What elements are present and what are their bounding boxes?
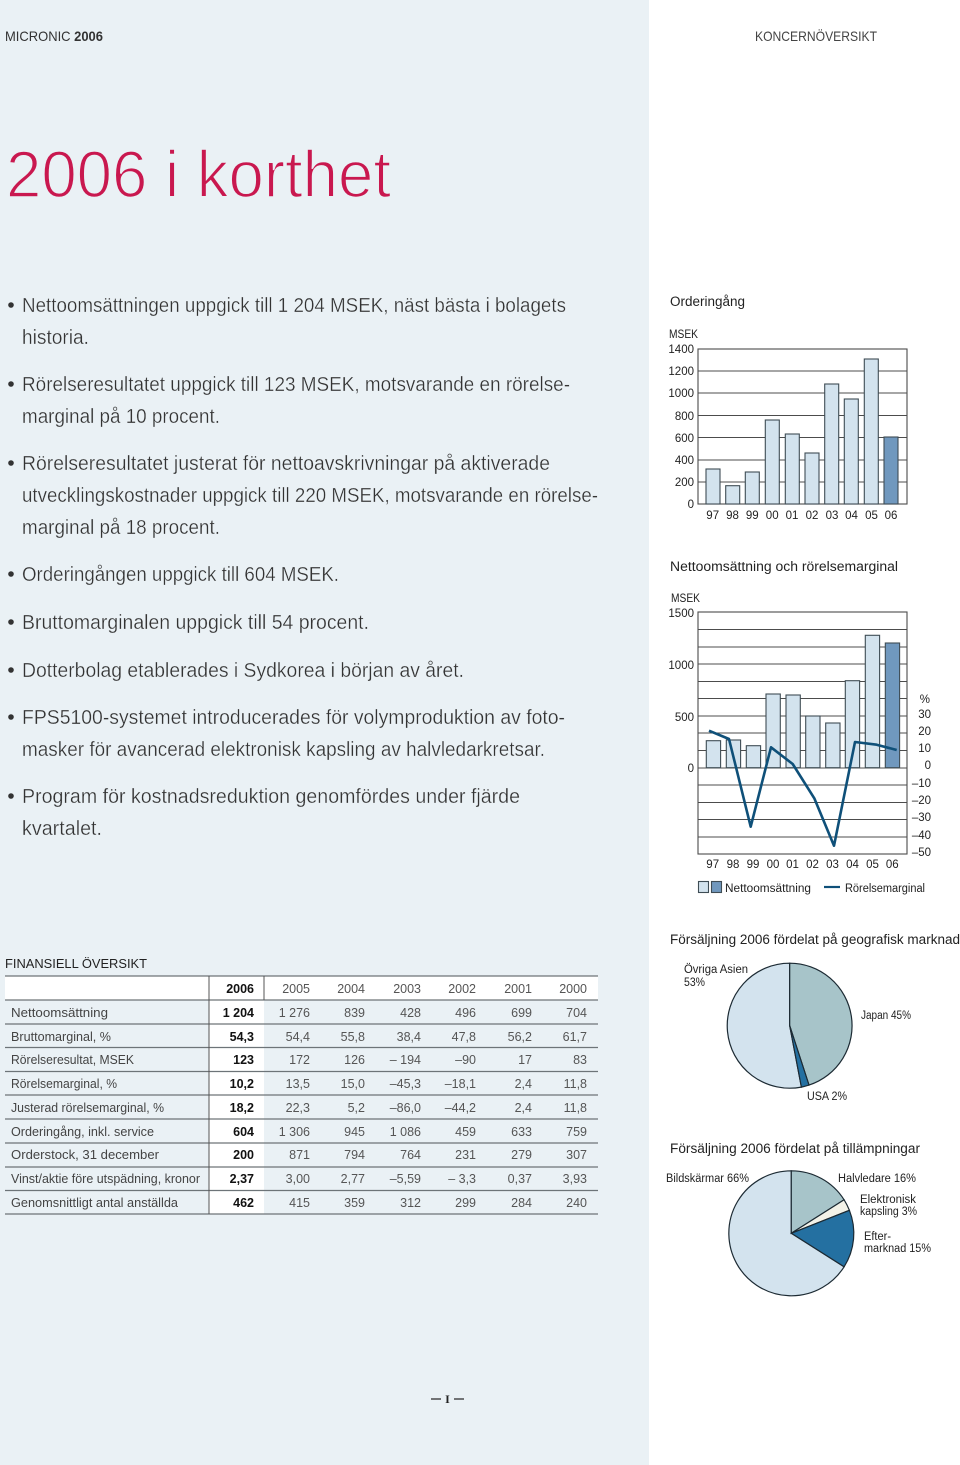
x axis labels: 97 [706, 859, 719, 871]
right axis labels: –10 [912, 778, 931, 790]
row: Nettoomsättning [11, 1006, 587, 1020]
bullet: rörelseresultat [8, 373, 570, 428]
x axis labels: 04 [845, 510, 858, 522]
row: Orderstock: 871 [289, 1148, 310, 1162]
bullet: justerat rörelseresultat [8, 452, 598, 539]
row: Rörelsemarginal: Rörelsemarginal, % [11, 1077, 117, 1091]
right axis labels: –20 [912, 795, 931, 807]
bullet: bruttomarginal: Bruttomarginalen uppgick till 54 procent. [22, 611, 369, 634]
bullet: rörelseresultat: Rörelseresultatet uppgick till 123 MSEK, motsvarande en rörelse- [22, 373, 570, 396]
chart heading: Försäljning 2006 fördelat på tillämpningar [670, 1141, 920, 1156]
chart heading: Nettoomsättning och rörelsemarginal [670, 559, 898, 574]
right axis labels: 20 [918, 726, 931, 738]
row: Orderingång: Orderingång, inkl. service [11, 1125, 154, 1139]
y axis labels: 0 [688, 499, 694, 511]
row: Vinst/aktie: – 3,3 [448, 1172, 476, 1186]
row: Rörelseresultat: Rörelseresultat, MSEK [11, 1053, 135, 1067]
row: Genomsnittligt antal anställda: 359 [344, 1196, 365, 1210]
chart: Nettoomsättning och rörelsemarginal [668, 559, 931, 895]
bullet: justerat rörelseresultat: Rörelseresultatet justerat för nettoavskrivningar på aktiverade [22, 452, 550, 475]
bullet: dotterbolag: Dotterbolag etablerades i Sydkorea i början av året. [22, 659, 464, 682]
row: Nettoomsättning: 1 204 [223, 1006, 254, 1020]
y axis labels: 1200 [668, 366, 694, 378]
row: Genomsnittligt antal anställda: Genomsnittligt antal anställda [11, 1196, 178, 1210]
row: Orderingång: 1 306 [279, 1125, 310, 1139]
x axis labels: 04 [846, 859, 859, 871]
row: Vinst/aktie: Vinst/aktie före utspädning, kronor [11, 1172, 200, 1186]
row: Bruttomarginal: 54,4 [286, 1030, 310, 1044]
row: Vinst/aktie: 0,37 [508, 1172, 532, 1186]
row: Justerad rörelsemarginal: 22,3 [286, 1101, 310, 1115]
row: Rörelseresultat: 17 [518, 1053, 532, 1067]
row: Orderstock: Orderstock, 31 december [11, 1148, 159, 1162]
row: Genomsnittligt antal anställda [11, 1196, 587, 1210]
pie labels: Elektronisk [860, 1194, 916, 1206]
left axis labels: 0 [688, 763, 694, 775]
row: Nettoomsättning: 1 276 [279, 1006, 310, 1020]
row: Vinst/aktie: –5,59 [390, 1172, 421, 1186]
x axis labels: 01 [786, 510, 798, 522]
y axis labels: 400 [675, 455, 694, 467]
x axis labels: 05 [865, 510, 878, 522]
left axis labels: 500 [675, 712, 694, 724]
x axis labels: 03 [826, 859, 839, 871]
row: Nettoomsättning: 699 [511, 1006, 532, 1020]
y axis labels: 200 [675, 477, 694, 489]
row: Orderstock: 200 [233, 1148, 254, 1162]
x axis labels [706, 859, 899, 871]
bullet: justerat rörelseresultat: marginal på 18 procent. [22, 516, 220, 539]
y axis labels: 600 [675, 433, 694, 445]
pie chart: tillämpningar [666, 1141, 931, 1296]
x axis labels: 99 [747, 859, 759, 871]
row: Rörelsemarginal: –18,1 [445, 1077, 476, 1091]
table: finansiell översikt [5, 956, 598, 1214]
pie labels: USA 2% [807, 1091, 847, 1103]
left axis labels: MSEK [671, 593, 700, 605]
x axis labels: 01 [786, 859, 799, 871]
x axis labels: 03 [826, 510, 838, 522]
right axis labels: –50 [912, 847, 931, 859]
row: Vinst/aktie: 2,37 [230, 1172, 254, 1186]
pie labels: Halvledare 16% [838, 1173, 916, 1185]
bullet: FPS5100: masker för avancerad elektronisk kapsling av halvledarkretsar. [22, 738, 545, 761]
page number: I [445, 1392, 450, 1406]
row: Orderstock: 307 [566, 1148, 587, 1162]
row: Rörelseresultat: 172 [289, 1053, 310, 1067]
x axis labels: 98 [727, 859, 739, 871]
row: Nettoomsättning: Nettoomsättning [11, 1006, 108, 1020]
row: Rörelseresultat: 126 [344, 1053, 365, 1067]
legend: Rörelsemarginal [845, 883, 925, 895]
header row: 2006 [226, 982, 254, 996]
x axis labels: 02 [806, 510, 818, 522]
row: Bruttomarginal: 47,8 [452, 1030, 476, 1044]
bullet: justerat rörelseresultat: utvecklingskostnader uppgick till 220 MSEK, motsvarande en rörelse- [22, 484, 598, 507]
right axis labels: –30 [912, 812, 931, 824]
row: Orderstock: 764 [400, 1148, 421, 1162]
bullet: nettoomsättning: Nettoomsättningen uppgick till 1 204 MSEK, näst bästa i bolagets [22, 294, 566, 317]
row: Justerad rörelsemarginal [11, 1101, 587, 1115]
row: Justerad rörelsemarginal: 18,2 [230, 1101, 254, 1115]
row: Rörelseresultat: – 194 [390, 1053, 421, 1067]
row: Rörelsemarginal: 13,5 [286, 1077, 310, 1091]
table heading: FINANSIELL ÖVERSIKT [5, 956, 147, 971]
row: Nettoomsättning: 839 [344, 1006, 365, 1020]
y axis labels [668, 329, 698, 511]
x axis labels: 02 [806, 859, 819, 871]
row: Orderingång: 945 [344, 1125, 365, 1139]
row: Vinst/aktie: 3,93 [563, 1172, 587, 1186]
chart heading: Orderingång [670, 294, 745, 309]
header row: 2002 [448, 982, 476, 996]
row: Justerad rörelsemarginal: 11,8 [564, 1101, 587, 1115]
slice: Bildskärmar [729, 1171, 844, 1296]
row: Vinst/aktie: 3,00 [286, 1172, 310, 1186]
bars [706, 359, 898, 504]
row: Justerad rörelsemarginal: –86,0 [390, 1101, 421, 1115]
header left: MICRONIC 2006 [5, 28, 103, 44]
pie labels: Övriga Asien [684, 964, 748, 976]
row: Orderingång [11, 1125, 587, 1139]
y axis labels: 1000 [668, 388, 694, 400]
bullet: FPS5100: FPS5100-systemet introducerades för volymproduktion av foto- [22, 706, 565, 729]
header row: 2001 [504, 982, 532, 996]
background panel [0, 0, 649, 1465]
bullet list [8, 294, 598, 840]
pie labels: marknad 15% [864, 1243, 931, 1255]
row: Rörelsemarginal: 2,4 [515, 1077, 532, 1091]
row: Bruttomarginal: 38,4 [397, 1030, 421, 1044]
row: Rörelsemarginal: –45,3 [390, 1077, 421, 1091]
bullet: kostnadsreduktion: kvartalet. [22, 817, 102, 840]
row: Orderstock: 231 [455, 1148, 476, 1162]
pie labels [666, 1173, 931, 1255]
row: Bruttomarginal: 56,2 [508, 1030, 532, 1044]
bullet: kostnadsreduktion: Program för kostnadsreduktion genomfördes under fjärde [22, 785, 520, 808]
row: Nettoomsättning: 704 [566, 1006, 587, 1020]
slice: Eftermarknad [791, 1210, 854, 1267]
left axis labels [668, 593, 700, 775]
x axis labels: 00 [766, 510, 779, 522]
bullet: rörelseresultat: marginal på 10 procent. [22, 405, 220, 428]
left axis labels: 1000 [668, 660, 694, 672]
left axis labels: 1500 [668, 608, 694, 620]
bullet: FPS5100 [8, 706, 565, 761]
page number [431, 1392, 464, 1406]
legend [698, 882, 925, 895]
pie chart: geografisk marknad [670, 932, 960, 1103]
bullet: kostnadsreduktion [8, 785, 520, 840]
row: Orderingång: 604 [233, 1125, 254, 1139]
row: Justerad rörelsemarginal: 5,2 [348, 1101, 365, 1115]
header row: 2003 [393, 982, 421, 996]
row: Genomsnittligt antal anställda: 415 [289, 1196, 310, 1210]
header right: KONCERNÖVERSIKT [755, 27, 877, 44]
row: Genomsnittligt antal anställda: 299 [455, 1196, 476, 1210]
row: Rörelsemarginal: 10,2 [230, 1077, 254, 1091]
slice: Halvledare [791, 1171, 844, 1233]
legend: Nettoomsättning [725, 883, 811, 895]
row: Genomsnittligt antal anställda: 284 [511, 1196, 532, 1210]
row: Rörelseresultat: 123 [233, 1053, 254, 1067]
row: Rörelsemarginal [11, 1077, 587, 1091]
row: Rörelseresultat: 83 [573, 1053, 587, 1067]
row: Vinst/aktie: 2,77 [341, 1172, 365, 1186]
right axis labels: 30 [918, 709, 931, 721]
slice: Elektronisk kapsling [791, 1200, 849, 1233]
row: Nettoomsättning: 428 [400, 1006, 421, 1020]
row: Genomsnittligt antal anställda: 462 [233, 1196, 254, 1210]
right axis labels: % [920, 694, 930, 706]
x axis labels: 05 [866, 859, 879, 871]
row: Orderingång: 459 [455, 1125, 476, 1139]
row: Rörelsemarginal: 15,0 [341, 1077, 365, 1091]
row: Orderstock [11, 1148, 587, 1162]
x axis labels: 99 [746, 510, 759, 522]
header row: 2000 [559, 982, 587, 996]
title: 2006 i korthet [6, 137, 391, 211]
pie labels: Bildskärmar 66% [666, 1173, 749, 1185]
chart: Orderingång [668, 294, 907, 522]
row: Genomsnittligt antal anställda: 240 [566, 1196, 587, 1210]
bars [706, 635, 900, 768]
y axis labels: 1400 [668, 344, 694, 356]
line: rörelsemarginal [709, 731, 897, 846]
x axis labels: 06 [885, 510, 897, 522]
x axis labels: 98 [726, 510, 739, 522]
row: Bruttomarginal: 54,3 [230, 1030, 254, 1044]
x axis labels [706, 510, 897, 522]
slice: Övriga Asien [727, 963, 801, 1088]
slice: USA [790, 1026, 809, 1087]
pie labels [684, 964, 911, 1103]
bullet: nettoomsättning [8, 294, 566, 349]
row: Bruttomarginal: Bruttomarginal, % [11, 1030, 111, 1044]
row: Justerad rörelsemarginal: –44,2 [445, 1101, 476, 1115]
row: Rörelseresultat: –90 [455, 1053, 476, 1067]
row: Bruttomarginal: 61,7 [563, 1030, 587, 1044]
row: Nettoomsättning: 496 [455, 1006, 476, 1020]
x axis labels: 00 [767, 859, 779, 871]
row: Orderstock: 794 [344, 1148, 365, 1162]
row: Bruttomarginal: 55,8 [341, 1030, 365, 1044]
bullet: orderingång: Orderingången uppgick till 604 MSEK. [22, 563, 339, 586]
right axis labels: 0 [925, 760, 931, 772]
row: Justerad rörelsemarginal: Justerad rörelsemarginal, % [11, 1101, 164, 1115]
x axis labels: 97 [706, 510, 719, 522]
header row: 2004 [337, 982, 365, 996]
row: Rörelsemarginal: 11,8 [564, 1077, 587, 1091]
row: Vinst/aktie [11, 1172, 587, 1186]
pie labels: Efter- [864, 1231, 891, 1243]
header row: 2005 [282, 982, 310, 996]
row: Orderstock: 279 [511, 1148, 532, 1162]
y axis labels: 800 [675, 411, 694, 423]
slice: Japan [790, 963, 852, 1085]
header row [226, 982, 587, 996]
row: Bruttomarginal [11, 1030, 587, 1044]
y axis labels: MSEK [669, 329, 698, 341]
x axis labels: 06 [886, 859, 899, 871]
row: Orderingång: 759 [566, 1125, 587, 1139]
pie labels: Japan 45% [861, 1010, 911, 1022]
pie labels: 53% [684, 977, 705, 989]
right axis labels: 10 [918, 743, 931, 755]
right axis labels [912, 694, 931, 859]
pie labels: kapsling 3% [860, 1206, 917, 1218]
right axis labels: –40 [912, 830, 931, 842]
row: Genomsnittligt antal anställda: 312 [400, 1196, 421, 1210]
bullet: nettoomsättning: historia. [22, 326, 89, 349]
row: Orderingång: 633 [511, 1125, 532, 1139]
row: Rörelseresultat [11, 1053, 587, 1067]
row: Justerad rörelsemarginal: 2,4 [515, 1101, 532, 1115]
chart heading: Försäljning 2006 fördelat på geografisk marknad [670, 932, 960, 947]
row: Orderingång: 1 086 [390, 1125, 421, 1139]
